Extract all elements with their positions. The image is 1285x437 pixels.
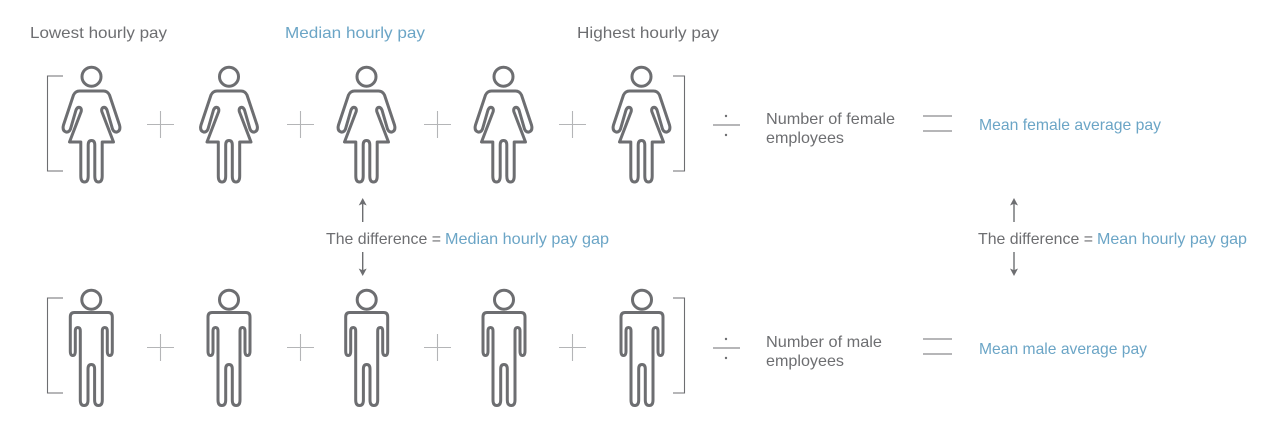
plus sign bbox=[287, 111, 314, 138]
left bracket bbox=[48, 76, 63, 171]
icon: male figure 1 bbox=[70, 290, 112, 406]
text: number of male employees: employees bbox=[766, 353, 844, 370]
male row equation bbox=[48, 290, 1147, 406]
arrow down bbox=[1010, 252, 1018, 276]
icon: female figure 1 bbox=[63, 67, 120, 182]
plus sign bbox=[559, 111, 586, 138]
plus sign bbox=[424, 111, 451, 138]
division sign bbox=[713, 338, 740, 359]
text: mean hourly pay gap: Mean hourly pay gap bbox=[1097, 231, 1247, 248]
icon: male figure 5 bbox=[621, 290, 663, 406]
equals sign bbox=[923, 339, 952, 354]
plus sign bbox=[147, 334, 174, 361]
text: number of female employees bbox=[766, 111, 895, 147]
icon: female figure 5 bbox=[613, 67, 670, 182]
heading: lowest hourly pay: Lowest hourly pay bbox=[30, 25, 167, 42]
mean difference callout bbox=[978, 198, 1247, 276]
icon: male figure 3 bbox=[346, 290, 388, 406]
icon: female figure 3 bbox=[338, 67, 395, 182]
arrow down bbox=[359, 252, 367, 276]
median difference callout bbox=[326, 198, 609, 276]
result: mean male average pay: Mean male average pay bbox=[979, 341, 1147, 358]
plus sign bbox=[559, 334, 586, 361]
text: number of female employees: Number of female bbox=[766, 111, 895, 128]
heading: median hourly pay: Median hourly pay bbox=[285, 25, 425, 42]
text: number of female employees: employees bbox=[766, 130, 844, 147]
heading: highest hourly pay: Highest hourly pay bbox=[577, 25, 719, 42]
arrow up bbox=[1010, 198, 1018, 222]
text: median hourly pay gap: The difference = bbox=[326, 231, 441, 248]
icon: male figure 4 bbox=[483, 290, 525, 406]
plus sign bbox=[147, 111, 174, 138]
result: mean female average pay: Mean female average pay bbox=[979, 117, 1161, 134]
equals sign bbox=[923, 116, 952, 131]
icon: female figure 4 bbox=[475, 67, 532, 182]
plus sign bbox=[287, 334, 314, 361]
text: number of male employees bbox=[766, 334, 882, 370]
left bracket bbox=[48, 298, 63, 393]
text: mean hourly pay gap bbox=[978, 231, 1247, 248]
plus sign bbox=[424, 334, 451, 361]
text: number of male employees: Number of male bbox=[766, 334, 882, 351]
icon: male figure 2 bbox=[208, 290, 250, 406]
female row equation bbox=[48, 67, 1161, 182]
right bracket bbox=[673, 76, 684, 171]
right bracket bbox=[673, 298, 684, 393]
text: median hourly pay gap: Median hourly pay gap bbox=[445, 231, 609, 248]
text: mean hourly pay gap: The difference = bbox=[978, 231, 1093, 248]
text: median hourly pay gap bbox=[326, 231, 609, 248]
division sign bbox=[713, 115, 740, 136]
icon: female figure 2 bbox=[201, 67, 257, 182]
arrow up bbox=[359, 198, 367, 222]
